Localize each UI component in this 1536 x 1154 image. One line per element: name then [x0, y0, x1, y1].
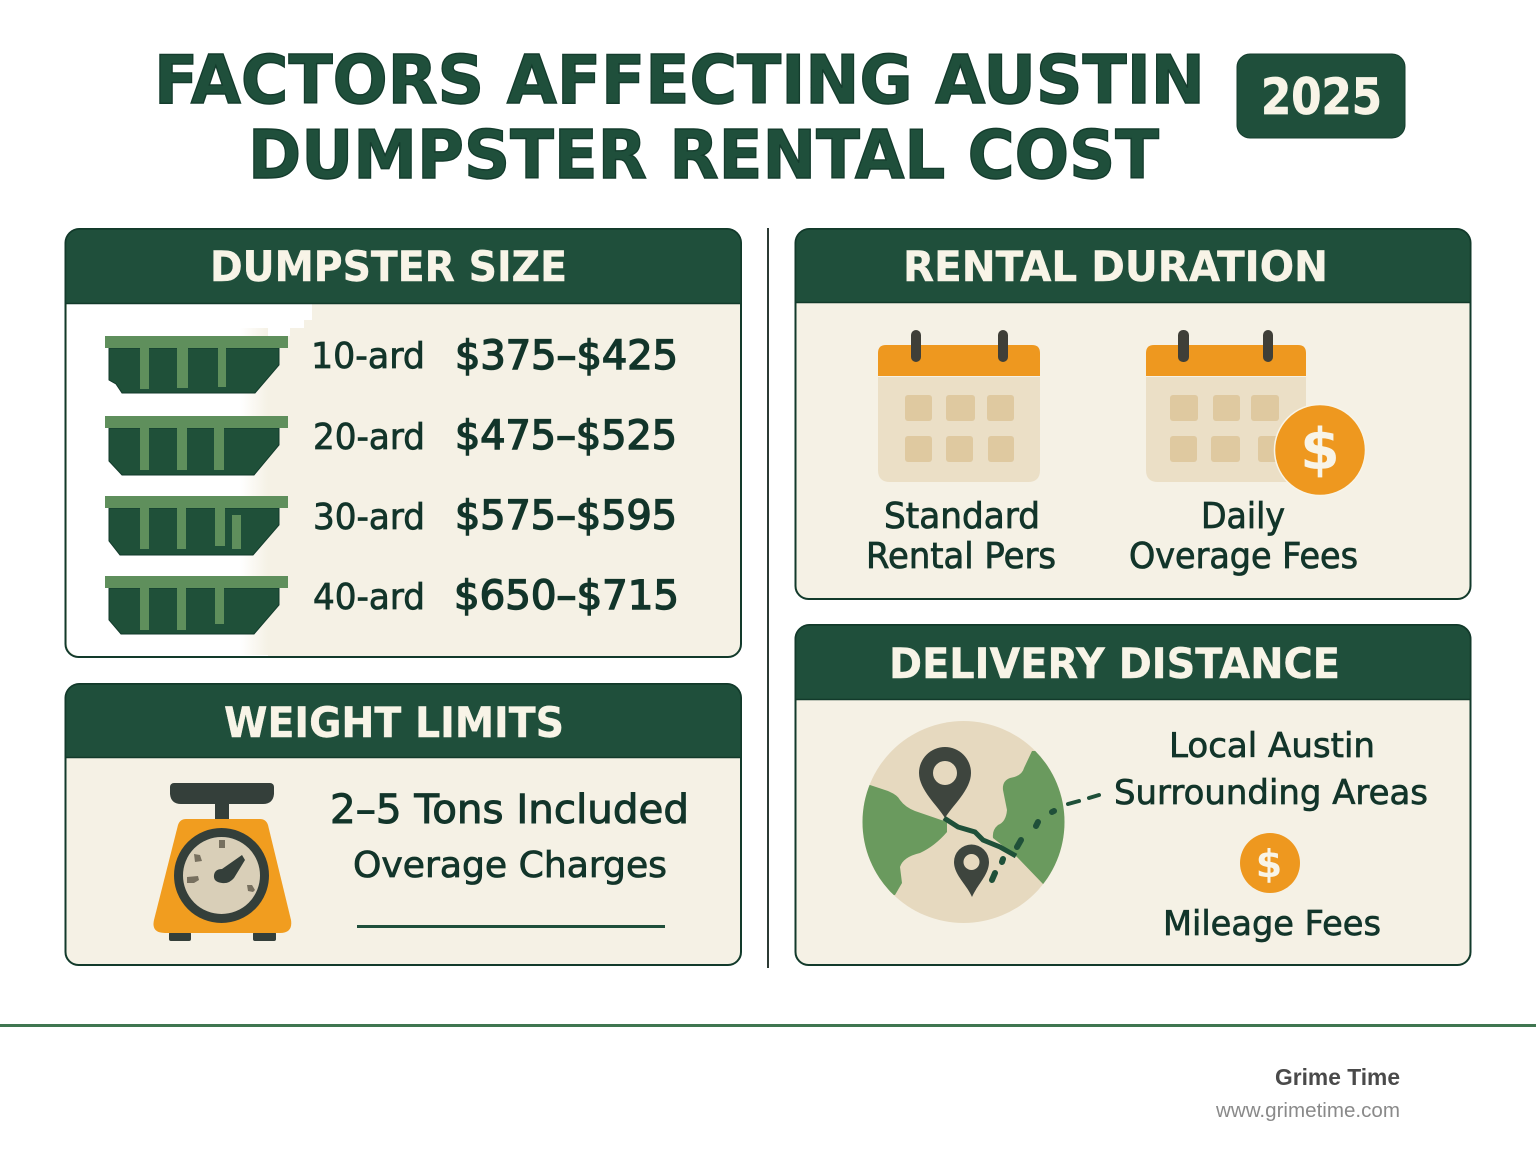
- label: standard rental periods: [866, 496, 1056, 577]
- label: mileage fees: Mileage Fees: [1163, 904, 1381, 944]
- title: [154, 41, 1205, 194]
- icon: calendar: [878, 330, 1040, 482]
- row: 30-yard: $575–$595: [455, 493, 677, 539]
- row: 40-yard: 40-ard: [313, 577, 425, 618]
- row: 10-yard: $375–$425: [455, 333, 678, 379]
- heading: dumpster size: DUMPSTER SIZE: [210, 242, 567, 291]
- icon: map with pins: [840, 721, 1099, 923]
- icon: calendar with fee: $: [1300, 417, 1340, 483]
- label: surrounding areas: Surrounding Areas: [1114, 773, 1428, 813]
- icon: dollar coin: $: [1256, 842, 1282, 886]
- title: FACTORS AFFECTING AUSTIN: [154, 41, 1205, 119]
- panel: dumpster size: [66, 229, 741, 657]
- heading: delivery distance: DELIVERY DISTANCE: [889, 639, 1340, 688]
- panel: delivery distance: [796, 625, 1470, 965]
- panel: rental duration: [796, 229, 1470, 599]
- title: DUMPSTER RENTAL COST: [248, 116, 1159, 194]
- icon: calendar with fee: [1146, 330, 1366, 496]
- center divider: [767, 228, 769, 968]
- label: daily overage fees: Overage Fees: [1129, 536, 1358, 577]
- text: tons included: 2–5 Tons Included: [330, 787, 689, 833]
- row: 30-yard: 30-ard: [313, 497, 425, 538]
- label: local austin: Local Austin: [1169, 726, 1375, 766]
- label: standard rental periods: Standard: [884, 496, 1040, 537]
- footer rule: [0, 1024, 1536, 1027]
- footer: brand: Grime Time: [1275, 1064, 1400, 1090]
- footer: brand: www.grimetime.com: [1215, 1100, 1400, 1122]
- row: 20-yard: 20-ard: [313, 417, 425, 458]
- row: 40-yard: $650–$715: [454, 573, 679, 619]
- icon: dollar coin: [1240, 833, 1300, 893]
- text: overage charges: Overage Charges: [353, 845, 667, 886]
- row: 10-yard: 10-ard: [311, 336, 425, 377]
- label: daily overage fees: Daily: [1201, 496, 1285, 537]
- footer: brand: [1215, 1064, 1400, 1122]
- heading: rental duration: RENTAL DURATION: [903, 242, 1328, 291]
- year badge: [1237, 54, 1405, 138]
- row: 10-yard: [105, 333, 678, 393]
- icon: scale: [153, 783, 291, 941]
- panel: weight limits: [66, 684, 741, 965]
- row: 20-yard: $475–$525: [455, 413, 677, 459]
- label: standard rental periods: Rental Pers: [866, 536, 1056, 577]
- year badge: 2025: [1261, 68, 1382, 126]
- label: daily overage fees: [1129, 496, 1358, 577]
- row: 20-yard: [105, 413, 677, 475]
- heading: weight limits: WEIGHT LIMITS: [224, 698, 564, 747]
- row: 40-yard: [105, 573, 679, 634]
- row: 30-yard: [105, 493, 677, 555]
